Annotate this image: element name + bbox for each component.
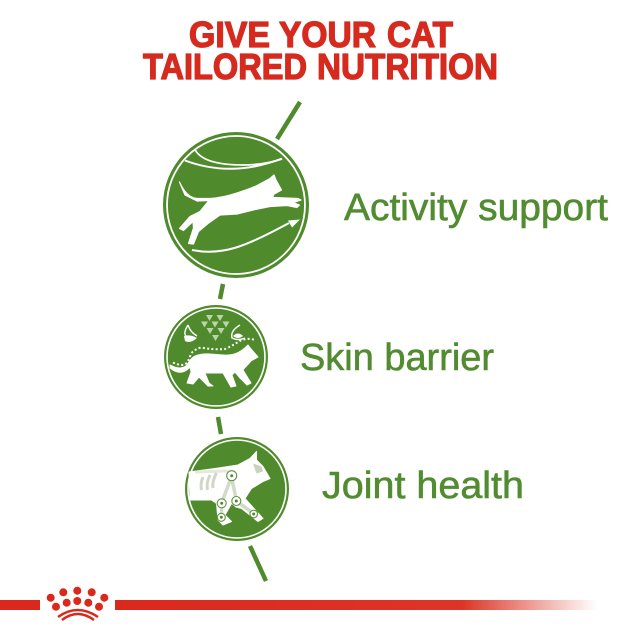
icon: crown logo [47, 587, 108, 620]
title: YOUR [279, 14, 376, 55]
label: activity support: Activity support [344, 187, 608, 229]
title: NUTRITION [317, 46, 498, 87]
connector line: bottom [250, 546, 266, 581]
icon: activity support [163, 132, 309, 278]
title: GIVE [189, 14, 270, 55]
title: CAT [387, 14, 453, 55]
label: joint health: Joint health [322, 465, 524, 507]
connector line: activity to skin [220, 284, 223, 299]
footer bar left [0, 600, 40, 610]
footer bar right [115, 600, 597, 610]
title: TAILORED [143, 46, 307, 87]
icon: joint health [185, 437, 289, 541]
title [143, 14, 498, 87]
connector line: skin to joint [218, 417, 221, 434]
connector line: top [277, 102, 300, 139]
icon: skin barrier [164, 305, 268, 409]
label: skin barrier: Skin barrier [300, 337, 494, 379]
